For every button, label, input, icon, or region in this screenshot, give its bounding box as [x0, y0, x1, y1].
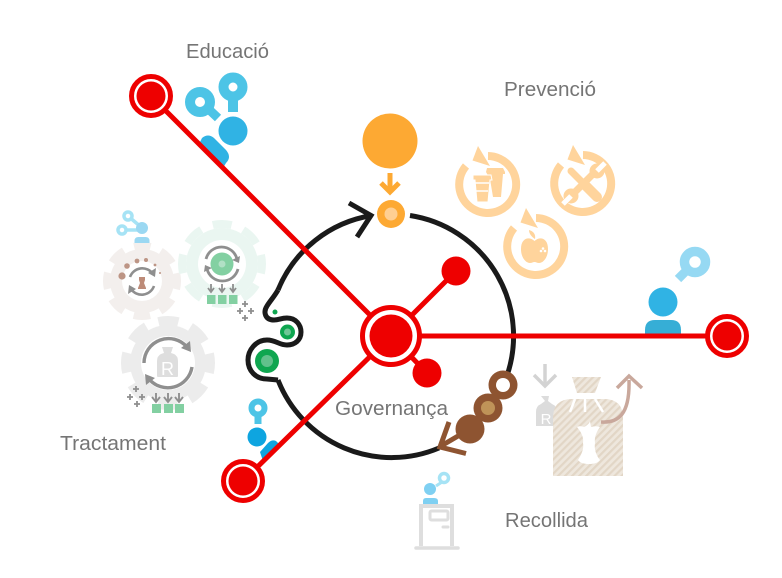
hub: [362, 308, 420, 364]
heading: Tractament: Tractament: [60, 433, 166, 455]
heading: Educació: Educació: [186, 41, 269, 63]
icon: repair tools: [554, 145, 611, 212]
heading: Prevenció: Prevenció: [504, 79, 596, 101]
arrowhead into orange node: [349, 203, 371, 237]
branch node: lower: [412, 358, 442, 388]
gear: waste sorting, beige: [107, 246, 177, 316]
green stages on squiggle: [255, 310, 295, 373]
heading: Governança: Governança: [335, 398, 449, 420]
icon: reuse food apple: [507, 208, 564, 275]
gear: composting, green: [182, 224, 262, 321]
orange prevention input: [362, 114, 418, 228]
icon: reuse cups: [459, 146, 516, 213]
icon: person with keys above the gears: [118, 212, 150, 243]
icon: person with key, right: [645, 252, 706, 336]
heading: Recollida: Recollida: [505, 510, 589, 532]
red network lines and hub: [132, 76, 746, 500]
icon: small residual bag with down arrow: [534, 364, 557, 428]
branch node: upper: [442, 256, 470, 286]
brown collection stages and arrow: [440, 370, 518, 454]
gear: residual waste, grey: R: [161, 359, 174, 379]
node: right: [708, 316, 746, 356]
icon: person with keys, Educació: [190, 78, 248, 168]
gear: residual waste, grey: [126, 321, 210, 413]
icon: person with key, bottom left: [248, 402, 280, 461]
circular cycle ring with squiggle: [248, 203, 514, 458]
node: Educació: [132, 76, 170, 116]
node: Tractament: [224, 462, 262, 500]
icon: organic waste bag with apple core: [553, 376, 642, 476]
icon: small residual bag with down arrow: R: [541, 411, 552, 428]
icon: door with person and key: [416, 474, 458, 548]
